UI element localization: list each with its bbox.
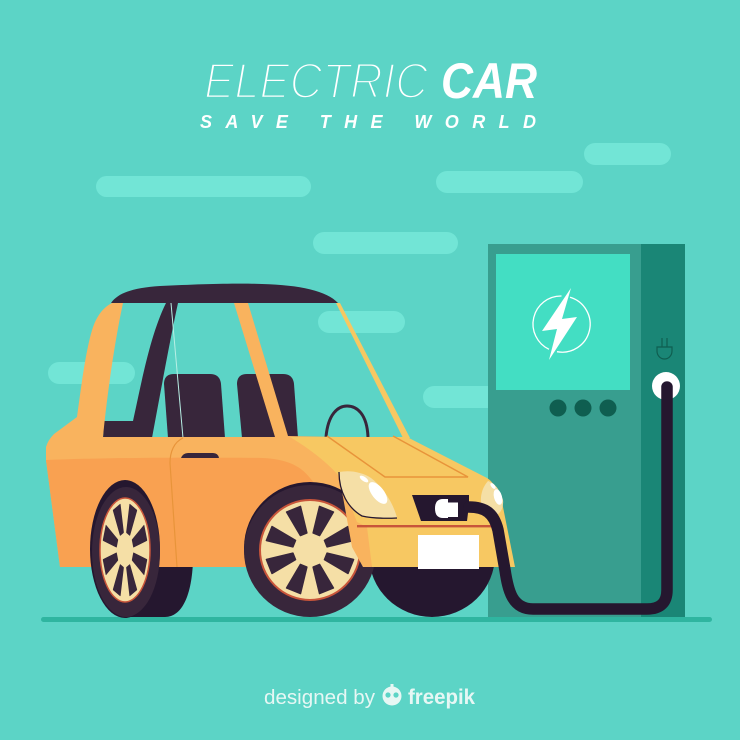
hood lines [327, 436, 468, 477]
subtitle: SAVE THE WORLD [200, 112, 536, 132]
credit: freepik: freepik [408, 686, 475, 709]
rear tyre [92, 487, 160, 617]
front wheel arch [244, 482, 376, 614]
headlight outline [339, 472, 397, 518]
rear rim [100, 498, 150, 602]
front rim [260, 500, 360, 600]
window line [171, 303, 183, 438]
rear wheel [92, 487, 160, 617]
door handle [181, 453, 219, 458]
front wheel [244, 485, 376, 617]
grille [412, 495, 469, 521]
roof [111, 284, 338, 303]
front underside [369, 493, 495, 617]
title: car: CAR [441, 53, 537, 109]
back tyre [125, 560, 193, 617]
charging cable [469, 387, 667, 609]
car [46, 284, 515, 618]
clouds [48, 143, 671, 408]
charging station [488, 244, 685, 617]
station side [641, 244, 685, 617]
body upper [46, 303, 372, 567]
icon: freepik logo [382, 684, 402, 706]
hood [290, 437, 515, 567]
ground line [41, 617, 712, 622]
rear door frame [103, 303, 178, 438]
title [200, 53, 537, 132]
icon: lightning bolt in circle [533, 288, 590, 360]
door line [170, 438, 183, 567]
credit: designed by: designed by [264, 686, 376, 709]
trim line [357, 525, 492, 527]
body lower [46, 458, 350, 567]
headlight shine [365, 479, 391, 507]
footer credit [264, 684, 475, 709]
number plate [418, 535, 479, 569]
windscreen pillar [336, 303, 410, 438]
fender [338, 473, 372, 567]
socket [652, 372, 680, 400]
front spokes [266, 506, 354, 594]
plug head [435, 499, 458, 518]
indicator dots [550, 400, 616, 416]
icon: plug [657, 338, 672, 359]
front tyre [244, 485, 376, 617]
station front [488, 244, 641, 617]
rear spokes [103, 505, 147, 595]
title: electric: ELECTRIC [204, 53, 429, 109]
right headlight [481, 481, 504, 515]
rear wheel arch [90, 480, 160, 618]
left headlight [339, 471, 397, 519]
seats [164, 374, 298, 438]
steering wheel [326, 406, 368, 437]
screen [496, 254, 630, 390]
